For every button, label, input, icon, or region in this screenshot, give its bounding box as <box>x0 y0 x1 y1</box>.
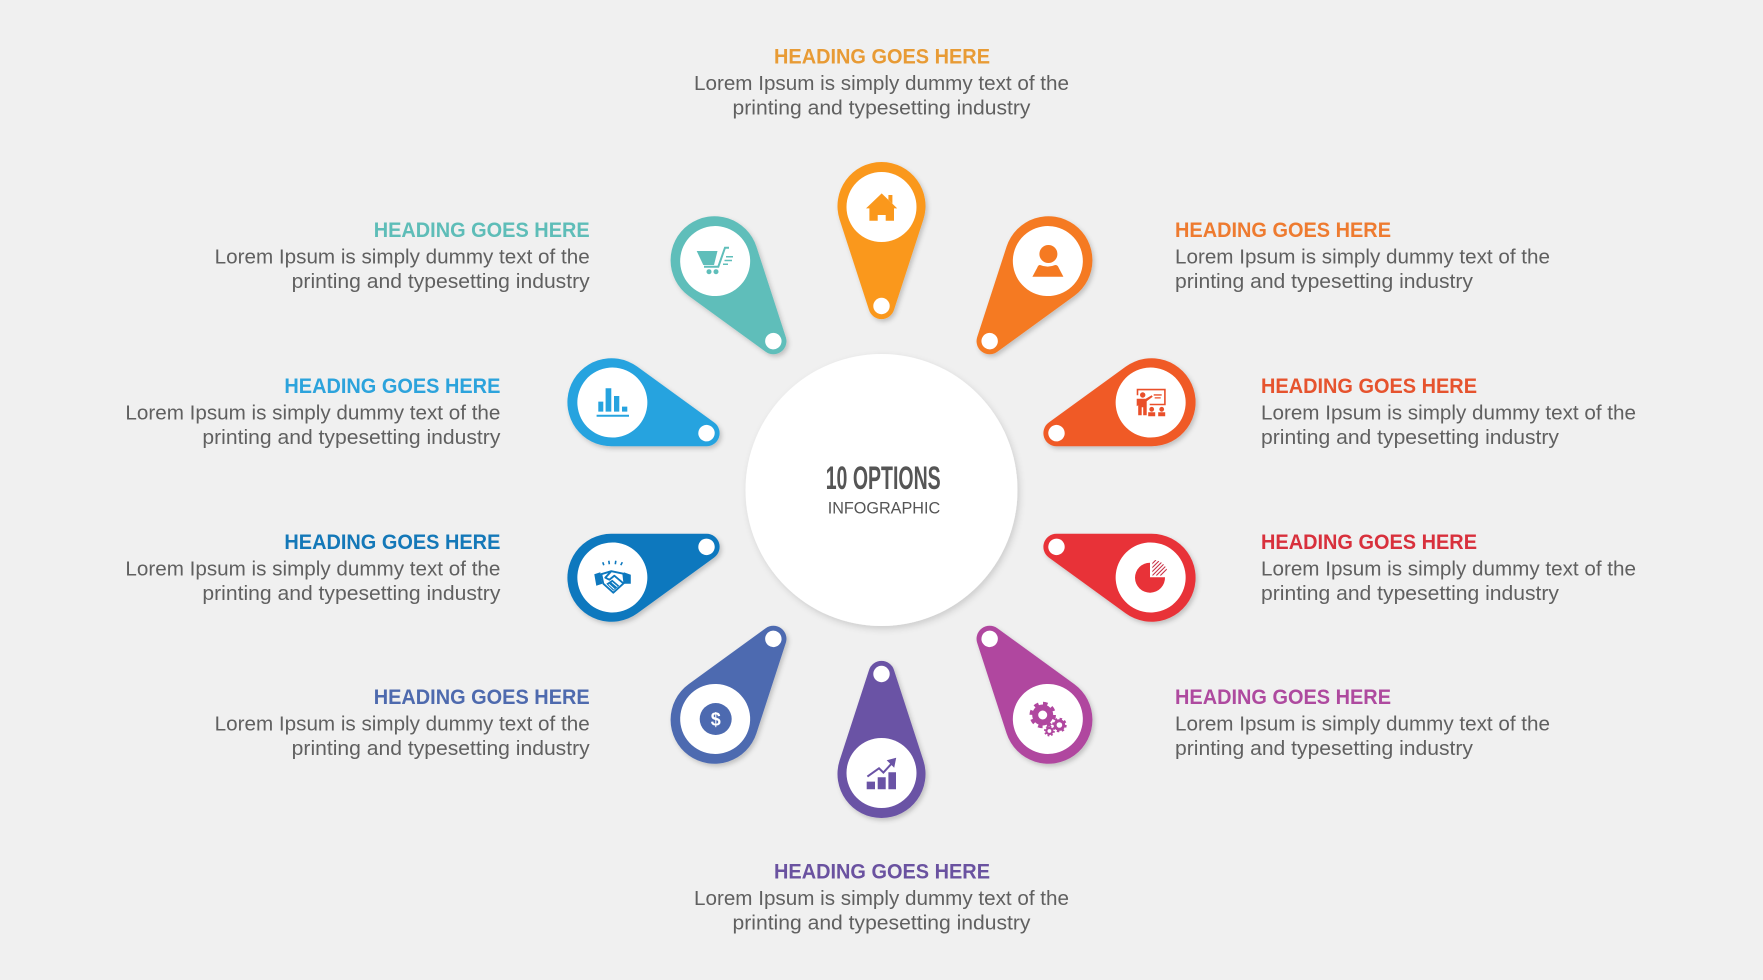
pin 10: cart <box>653 199 817 378</box>
icon: gears <box>1031 704 1066 736</box>
pin 3: presentation <box>1030 347 1207 479</box>
center subtitle: INFOGRAPHIC <box>828 499 940 517</box>
text block: left 8: printing and typesetting industry <box>202 583 501 605</box>
pin 7: dollar <box>653 602 817 781</box>
text block: upper left: Lorem Ipsum is simply dummy text of the <box>215 246 590 268</box>
pin 6: growth chart <box>838 661 926 818</box>
center circle <box>746 354 1018 626</box>
text block: bottom: Lorem Ipsum is simply dummy text of the <box>694 888 1069 910</box>
text block: right 4: Lorem Ipsum is simply dummy text of the <box>1261 558 1636 580</box>
text block: lower left: Lorem Ipsum is simply dummy text of the <box>215 714 590 736</box>
pin 1: home <box>838 162 926 319</box>
text block: upper left: printing and typesetting industry <box>292 271 591 293</box>
text block: left 8 <box>125 531 501 605</box>
pin 4: pie chart <box>1043 534 1200 626</box>
icon: bar chart <box>597 388 629 417</box>
text block: upper right <box>1175 219 1550 293</box>
text block: lower left: HEADING GOES HERE <box>374 686 590 709</box>
text block: upper left: HEADING GOES HERE <box>374 219 590 242</box>
text block: upper right: printing and typesetting industry <box>1175 271 1474 293</box>
text block: right 4 <box>1261 531 1636 605</box>
icon: handshake <box>594 561 631 593</box>
text block: upper left <box>215 219 591 293</box>
text block: lower right: printing and typesetting industry <box>1175 738 1474 760</box>
icon: dollar coin: $ <box>711 710 721 730</box>
text block: lower left <box>215 686 591 760</box>
text block: lower right <box>1175 686 1550 760</box>
text block: right 3: Lorem Ipsum is simply dummy text of the <box>1261 402 1636 424</box>
text block: right 4: printing and typesetting industry <box>1261 583 1560 605</box>
text block: bottom: printing and typesetting industry <box>732 913 1031 935</box>
icon: person <box>1032 245 1063 277</box>
icon: dollar coin <box>700 703 732 735</box>
text block: upper right: Lorem Ipsum is simply dummy text of the <box>1175 246 1550 268</box>
text block: lower right: Lorem Ipsum is simply dummy text of the <box>1175 714 1550 736</box>
pin 2: person <box>946 199 1110 378</box>
text block: left 8: HEADING GOES HERE <box>284 531 500 554</box>
icon: presentation <box>1137 389 1166 416</box>
text block: left 9: Lorem Ipsum is simply dummy text of the <box>125 402 500 424</box>
icon: growth chart <box>867 758 896 789</box>
text block: right 3: HEADING GOES HERE <box>1261 375 1477 398</box>
infographic canvas <box>127 49 1636 934</box>
text block: upper right: HEADING GOES HERE <box>1175 219 1391 242</box>
text block: left 9: HEADING GOES HERE <box>284 375 500 398</box>
icon: house <box>866 193 897 221</box>
text block: top: HEADING GOES HERE <box>774 45 990 68</box>
text block: right 4: HEADING GOES HERE <box>1261 531 1477 554</box>
center title: 10 OPTIONS <box>826 460 941 496</box>
text block: right 3 <box>1261 375 1636 449</box>
text block: bottom <box>694 860 1069 935</box>
text block: top <box>694 45 1069 119</box>
text block: top: printing and typesetting industry <box>732 98 1031 120</box>
text block: left 9: printing and typesetting industry <box>202 427 501 449</box>
text block: bottom: HEADING GOES HERE <box>774 860 990 884</box>
text block: lower right: HEADING GOES HERE <box>1175 686 1391 709</box>
text block: lower left: printing and typesetting industry <box>292 738 591 760</box>
icon: shopping cart <box>697 248 733 274</box>
text block: top: Lorem Ipsum is simply dummy text of the <box>694 73 1069 95</box>
pin 9: bar chart <box>556 347 733 479</box>
pin 8: handshake <box>556 501 733 633</box>
text block: right 3: printing and typesetting industry <box>1261 427 1560 449</box>
text block: left 9 <box>125 375 501 449</box>
pin 5: gears <box>946 602 1110 781</box>
text block: left 8: Lorem Ipsum is simply dummy text of the <box>125 558 500 580</box>
icon: pie chart <box>1135 560 1167 593</box>
